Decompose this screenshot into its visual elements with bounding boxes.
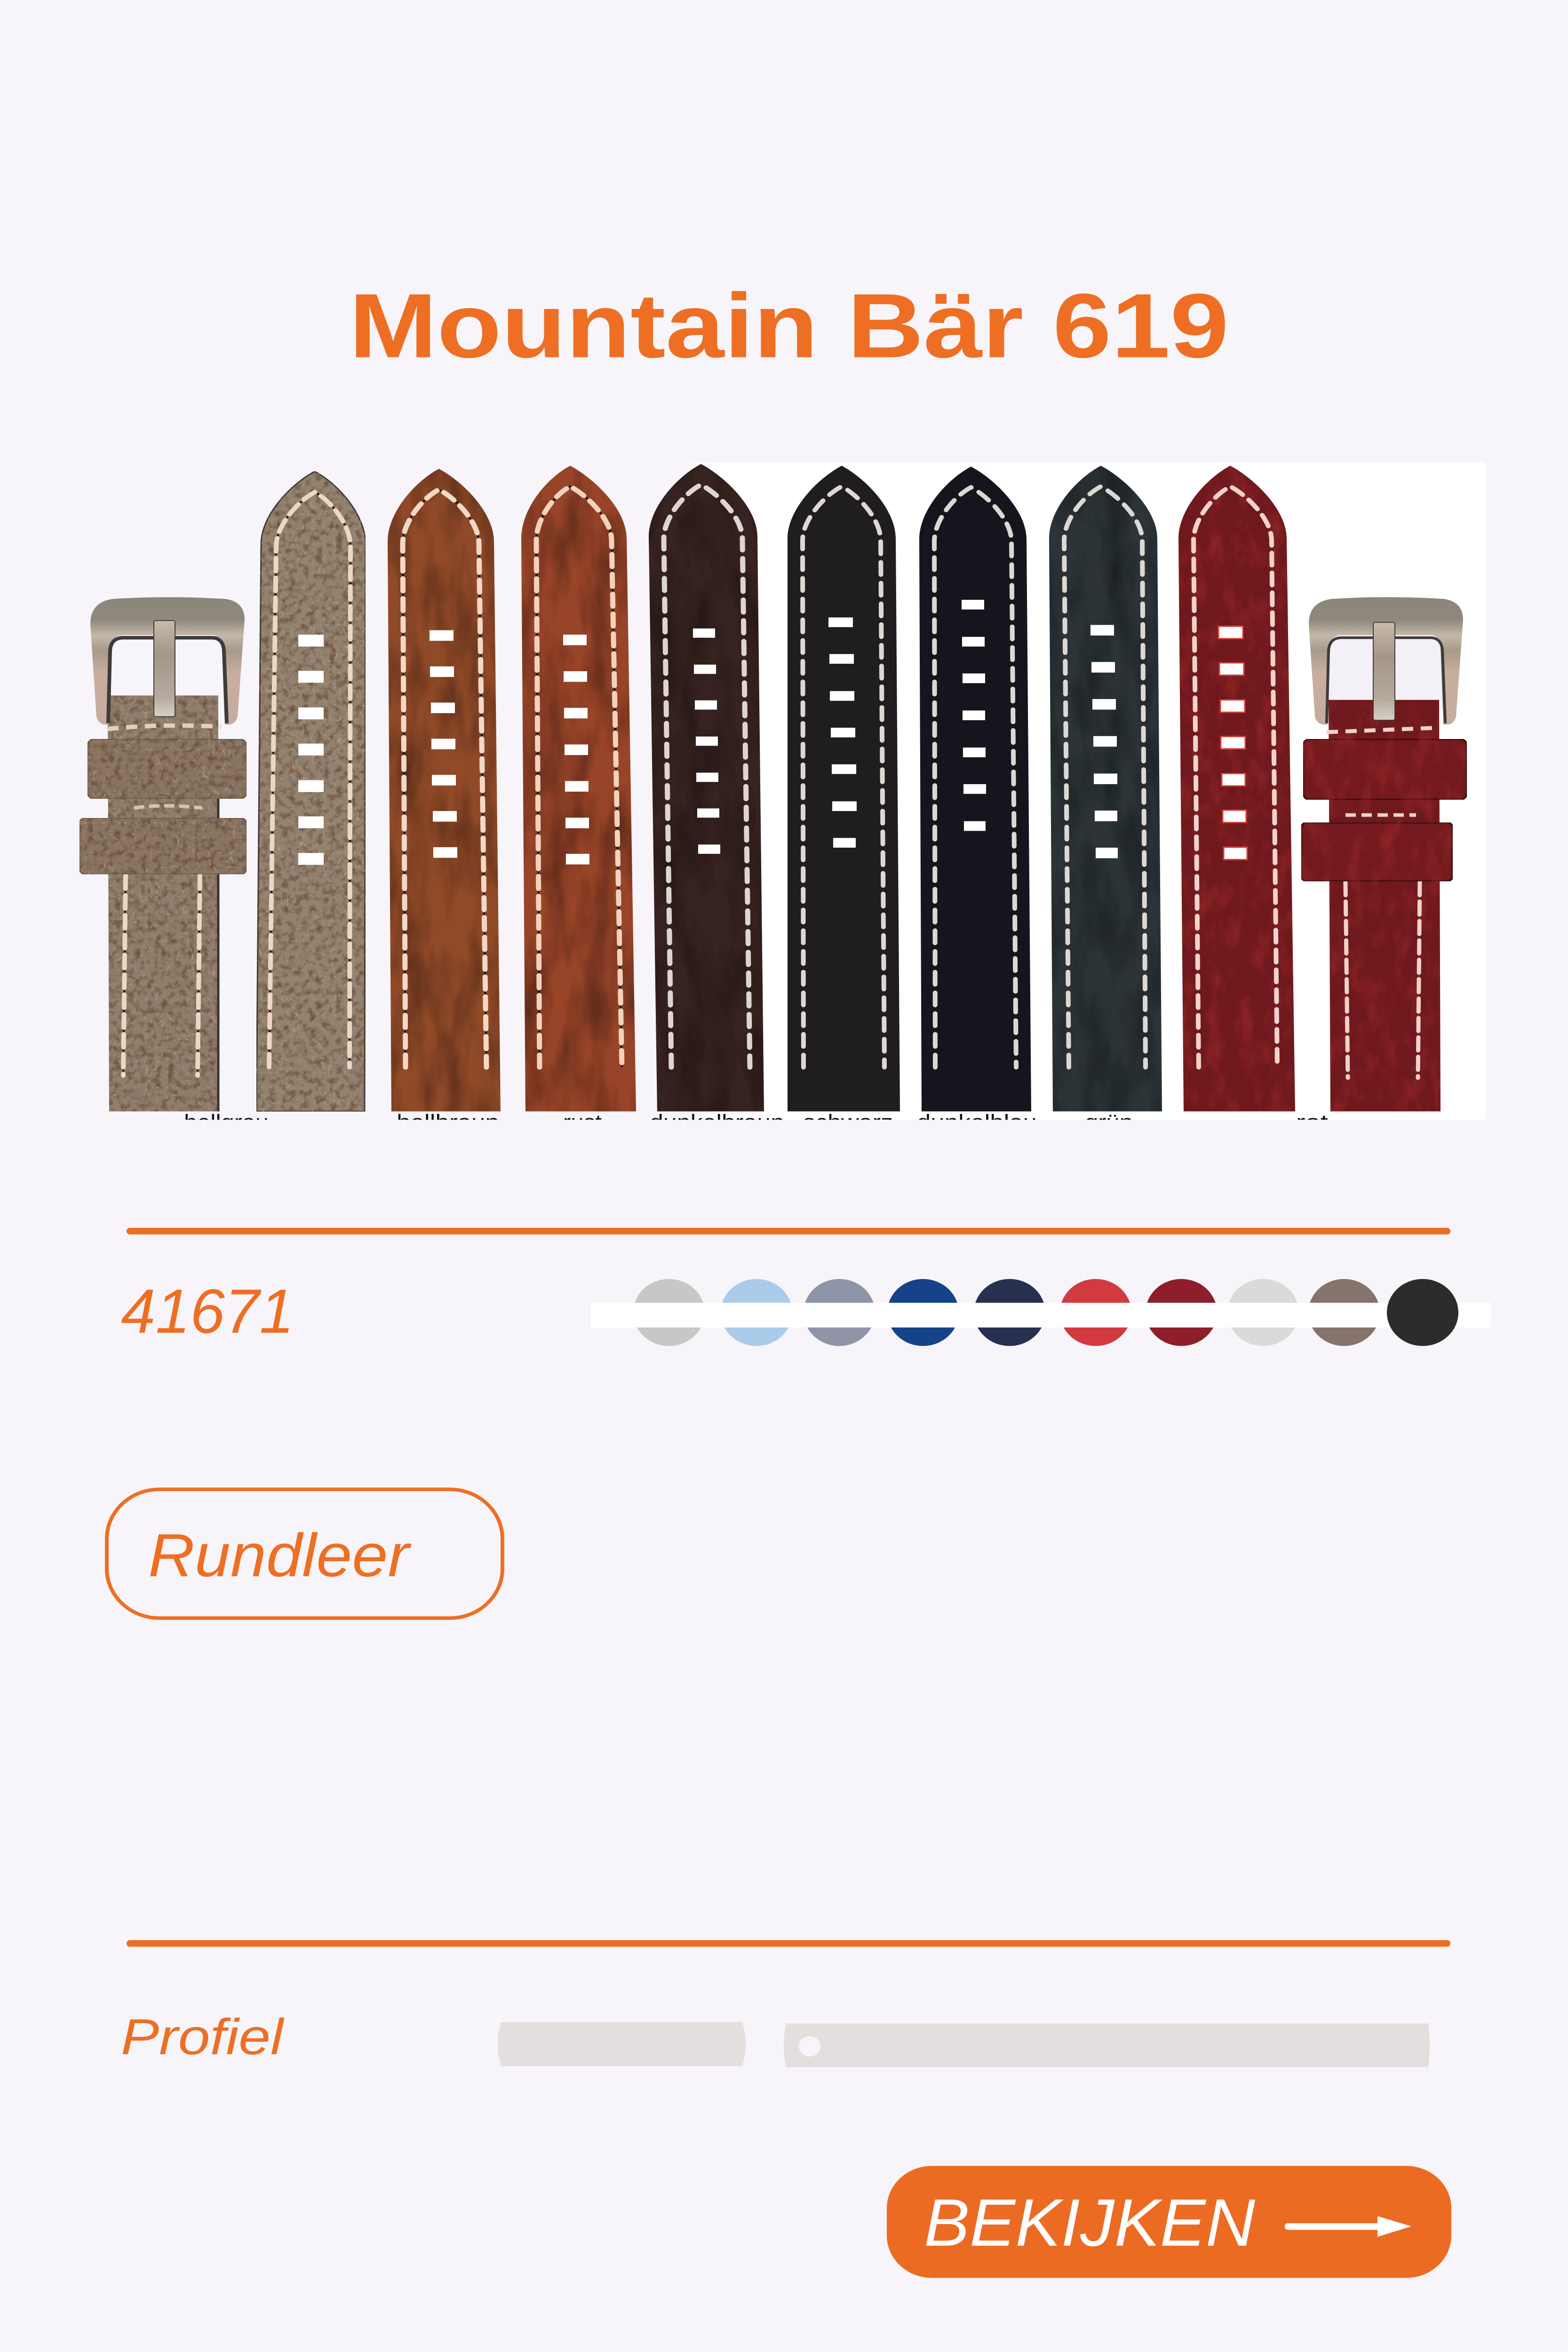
button: BEKIJKEN (924, 2185, 1256, 2260)
divider line top (127, 1228, 1450, 1234)
strap: hellbraun (388, 469, 501, 1112)
strap: rot (1178, 466, 1295, 1112)
divider line bottom (127, 1940, 1450, 1947)
strap: rust (521, 466, 636, 1112)
profile label: Profiel (121, 2008, 285, 2065)
strap: dunkelbraun (649, 464, 764, 1112)
profile bar short (498, 2022, 746, 2066)
icon: arrow (1285, 2216, 1411, 2237)
colour swatches (591, 1279, 1491, 1346)
material tag: Rundleer (148, 1522, 412, 1589)
clipped colour names under straps: schwarz (803, 1110, 893, 1134)
strap with buckle: hellgrau (80, 597, 247, 1112)
clipped colour names under straps: grün (1085, 1110, 1133, 1134)
panel: product photo of watch straps (80, 462, 1486, 1134)
strap: schwarz (788, 466, 900, 1112)
clipped colour names under straps: hellgrau (184, 1110, 269, 1134)
strap: dunkelblau (919, 467, 1031, 1112)
profile bar long with marker (784, 2024, 1430, 2067)
clipped colour names under straps: rust (563, 1110, 602, 1134)
strap: grün (1049, 466, 1162, 1112)
material tag (107, 1489, 502, 1618)
strap with buckle: rot (1301, 597, 1467, 1112)
clipped colour names under straps (185, 1114, 1328, 1120)
clipped colour names under straps: hellbraun (397, 1110, 499, 1134)
clipped colour names under straps: dunkelbraun (650, 1110, 784, 1134)
strap: hellgrau (256, 471, 366, 1112)
clipped colour names under straps: rot (1296, 1110, 1328, 1134)
clipped colour names under straps: dunkelblau (917, 1110, 1037, 1134)
article number: 41671 (121, 1276, 294, 1346)
button (887, 2166, 1451, 2278)
title: Mountain Bär 619 (349, 274, 1229, 377)
